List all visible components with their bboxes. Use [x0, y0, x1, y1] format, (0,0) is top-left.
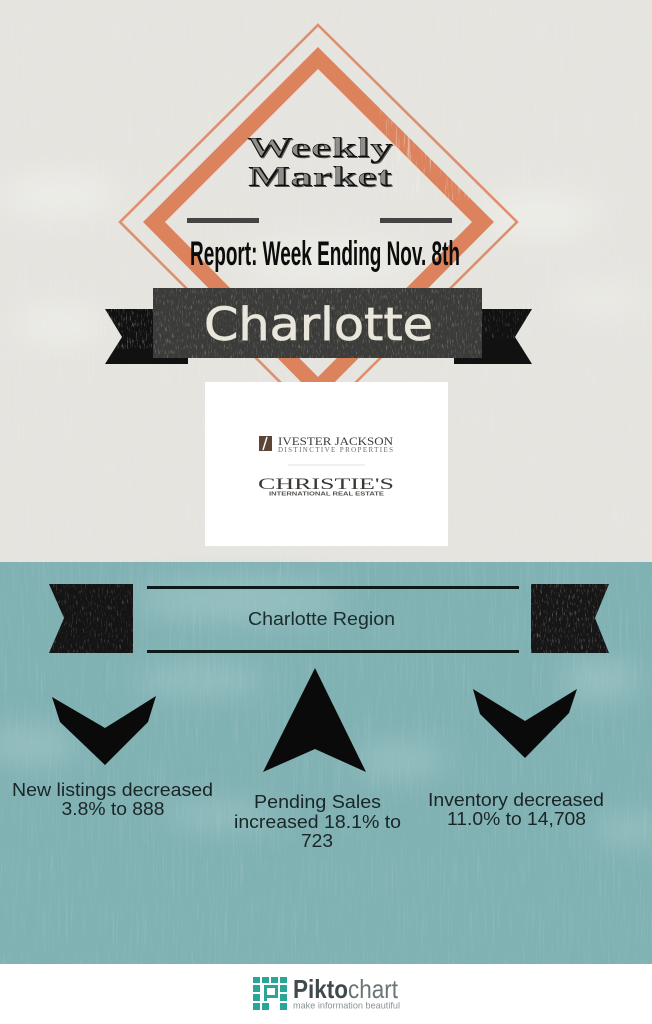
- panel: cream header background: [0, 0, 652, 562]
- banner: Charlotte Region: [49, 584, 609, 653]
- rule: bottom: [147, 650, 519, 653]
- divider: left rule: [187, 218, 259, 223]
- text: pending sales: 723: [301, 831, 333, 851]
- text: new listings: [12, 780, 213, 819]
- divider line: [288, 464, 365, 466]
- logo tagline: make information beautiful: [293, 1000, 400, 1012]
- title: Weekly Market: Market: [248, 162, 393, 193]
- text: inventory: 11.0% to 14,708: [447, 809, 586, 829]
- text: pending sales: Pending Sales: [254, 792, 381, 812]
- icon: double orange diamond frame: [120, 25, 517, 420]
- icon: Piktochart mark: [253, 977, 287, 1010]
- panel: sponsor logo card: [205, 382, 448, 546]
- text: inventory: Inventory decreased: [428, 790, 604, 810]
- panel: teal region background: [0, 562, 652, 964]
- region label: Charlotte Region: [248, 609, 395, 629]
- icon: down arrow new listings: [52, 696, 156, 765]
- text: new listings: 3.8% to 888: [62, 799, 164, 819]
- title: Weekly Market: Weekly: [247, 133, 393, 164]
- rule: top: [147, 586, 519, 589]
- banner label: Charlotte: [204, 298, 433, 351]
- text: new listings: New listings decreased: [12, 780, 213, 800]
- flag: left: [49, 584, 133, 653]
- banner: Charlotte ribbon: [105, 288, 532, 364]
- logo text: Ivester Jackson: DISTINCTIVE PROPERTIES: [278, 446, 393, 454]
- logo text: Christie's: [258, 476, 394, 498]
- icon: up arrow pending sales: [263, 668, 366, 772]
- icon: Ivester Jackson mark: [259, 436, 272, 451]
- text: pending sales: increased 18.1% to: [234, 812, 401, 832]
- logo text: Ivester Jackson: [278, 434, 393, 454]
- text: inventory: [428, 790, 604, 829]
- footer: white strip: [0, 964, 652, 1024]
- logo text: Piktochart: Piktochart: [293, 974, 399, 1004]
- flag: right: [531, 584, 609, 653]
- icon: down arrow inventory: [473, 689, 577, 758]
- divider: right rule: [380, 218, 452, 223]
- logo text: Christie's: CHRISTIE'S: [258, 476, 394, 493]
- title: Weekly Market: [247, 133, 393, 193]
- logo text: Christie's: INTERNATIONAL REAL ESTATE: [269, 492, 385, 498]
- text: pending sales: [234, 792, 401, 851]
- logo text: Ivester Jackson: IVESTER JACKSON: [278, 434, 393, 448]
